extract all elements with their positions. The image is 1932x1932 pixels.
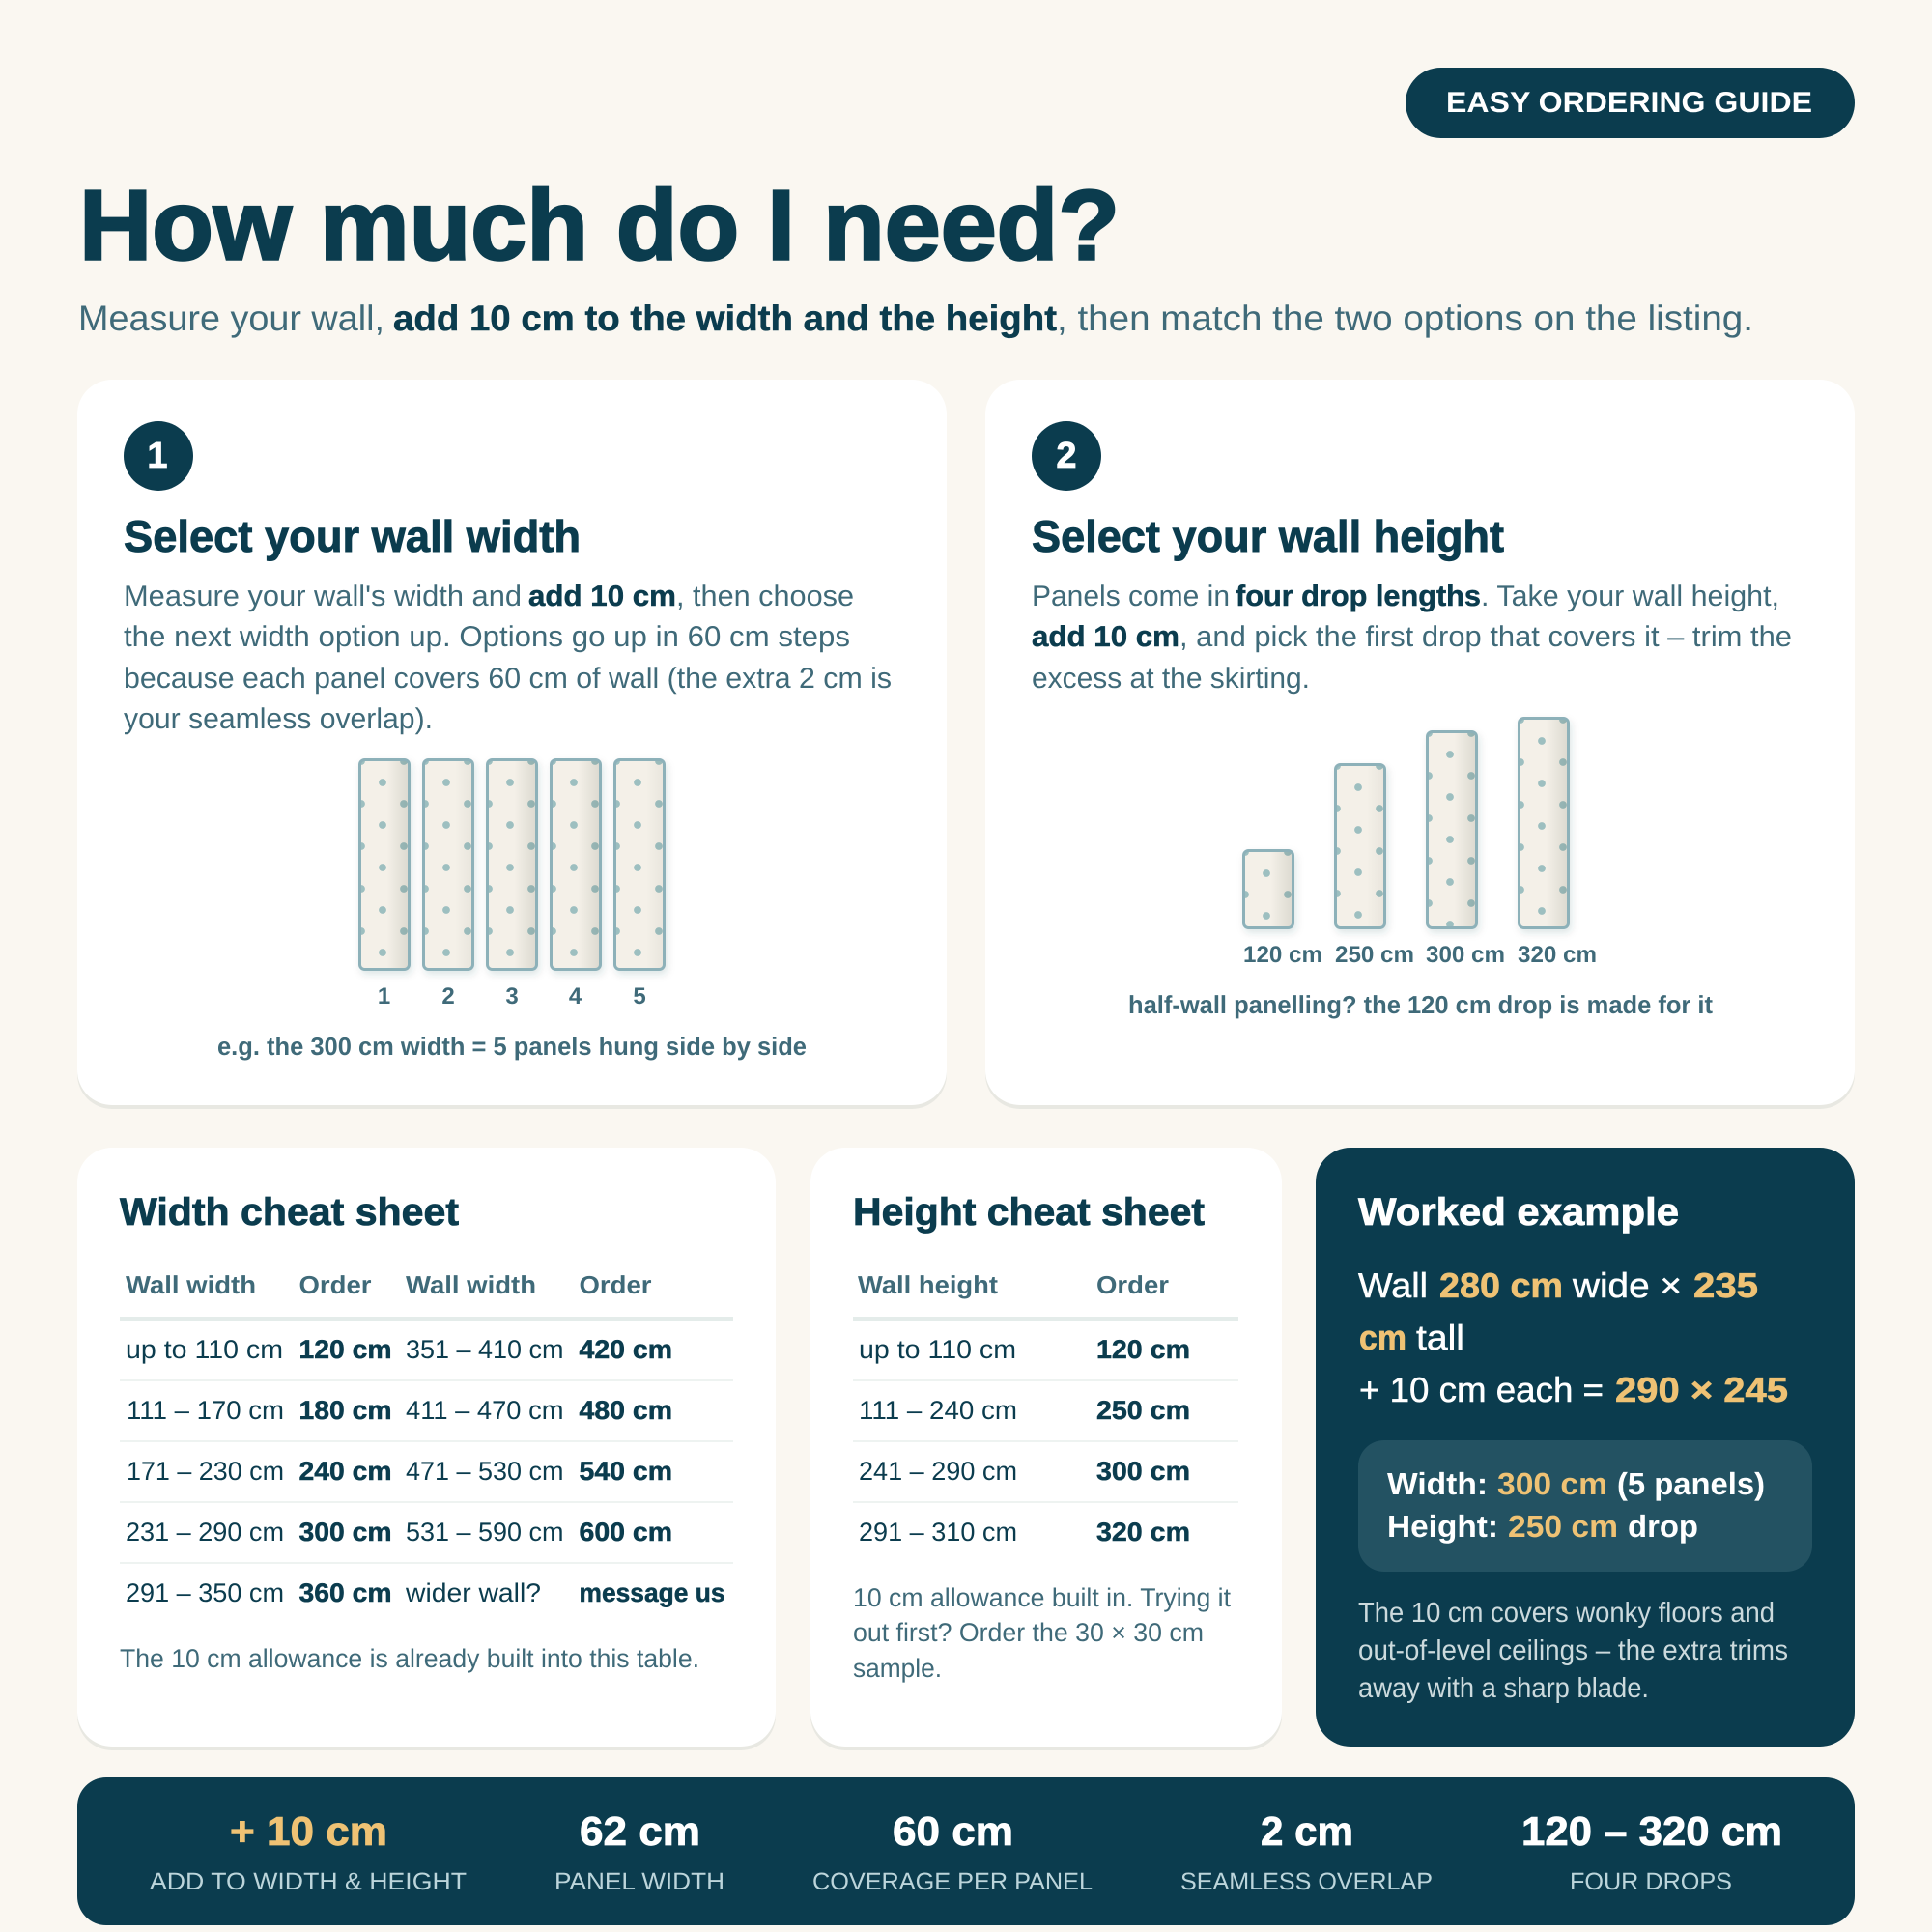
step number 2 xyxy=(1032,421,1101,491)
result box: (5 panels) xyxy=(1617,1466,1765,1501)
body text: width instructions: the next width option up. Options go up in 60 cm steps xyxy=(124,621,850,653)
heading: height cheat sheet: Height cheat sheet xyxy=(853,1191,1205,1234)
table: height to order: 300 cm xyxy=(1096,1457,1190,1486)
calculation lines: 290 × 245 xyxy=(1615,1370,1788,1409)
result box: Height: xyxy=(1387,1509,1498,1544)
illustration: five panels side by side: 4 xyxy=(569,983,582,1009)
table: width to order: Wall width xyxy=(406,1270,536,1299)
stat: add 10 cm: ADD TO WIDTH & HEIGHT xyxy=(150,1868,467,1895)
calculation lines xyxy=(1358,1265,1788,1409)
table: width to order: Order xyxy=(580,1270,651,1299)
body text: height instructions: Panels come in xyxy=(1032,581,1230,612)
stat: seamless overlap xyxy=(1180,1808,1433,1895)
calculation lines: 235 xyxy=(1693,1265,1758,1305)
table: width to order: 531 – 590 cm xyxy=(406,1518,564,1547)
body text: width instructions: your seamless overlap). xyxy=(124,703,433,735)
body text: height instructions: , and pick the first drop that covers it – trim the xyxy=(1179,621,1792,653)
table: width to order: 540 cm xyxy=(580,1457,672,1486)
badge: easy ordering guide: EASY ORDERING GUIDE xyxy=(1446,87,1812,119)
stat: four drops xyxy=(1521,1808,1782,1895)
stat: add 10 cm xyxy=(150,1808,467,1895)
illustration: five panels side by side xyxy=(359,759,665,1009)
title: How much do I need? xyxy=(79,170,1120,280)
stat: panel width: PANEL WIDTH xyxy=(554,1868,724,1895)
note: allowance and sample: out first? Order the 30 × 30 cm xyxy=(853,1618,1204,1647)
panel: select your wall width xyxy=(77,380,947,1109)
table: width to order: 471 – 530 cm xyxy=(406,1457,564,1486)
illustration: five panels side by side: 5 xyxy=(633,983,646,1009)
table: height to order: Order xyxy=(1096,1270,1169,1299)
explanation text: The 10 cm covers wonky floors and xyxy=(1358,1598,1775,1629)
stats bar xyxy=(77,1777,1855,1925)
table: width to order: up to 110 cm xyxy=(126,1335,283,1364)
table: height to order: 250 cm xyxy=(1096,1396,1190,1425)
table: width to order: 600 cm xyxy=(580,1518,672,1547)
note: allowance and sample: 10 cm allowance built in. Trying it xyxy=(853,1583,1231,1612)
table: width to order: 300 cm xyxy=(299,1518,392,1547)
illustration: four drop lengths: 300 cm xyxy=(1426,942,1505,968)
table: width to order: 360 cm xyxy=(299,1578,392,1607)
subtitle: , then match the two options on the listing. xyxy=(1057,298,1753,338)
stat: four drops: FOUR DROPS xyxy=(1570,1868,1732,1895)
explanation text: away with a sharp blade. xyxy=(1358,1673,1649,1704)
table: width to order: 111 – 170 cm xyxy=(127,1396,284,1425)
body text: width instructions: Measure your wall's width and xyxy=(124,581,522,612)
calculation lines: + 10 cm each = xyxy=(1359,1370,1604,1409)
table: height to order xyxy=(853,1270,1238,1547)
heading: worked example: Worked example xyxy=(1358,1191,1679,1234)
table: width to order: 120 cm xyxy=(299,1335,392,1364)
table: width to order: 180 cm xyxy=(299,1396,392,1425)
table: height to order: Wall height xyxy=(858,1270,998,1299)
illustration: five panels side by side: 1 xyxy=(378,983,390,1009)
calculation lines: tall xyxy=(1416,1318,1464,1357)
note: allowance built in: The 10 cm allowance is already built into this table. xyxy=(120,1644,699,1673)
result box: 300 cm xyxy=(1497,1466,1607,1501)
heading: select your wall width: Select your wall width xyxy=(124,511,581,561)
table: width to order: Wall width xyxy=(126,1270,256,1299)
table: height to order: up to 110 cm xyxy=(859,1335,1016,1364)
illustration: four drop lengths: 120 cm xyxy=(1243,942,1322,968)
table: height to order: 320 cm xyxy=(1096,1518,1190,1547)
table: width to order: 231 – 290 cm xyxy=(126,1518,284,1547)
body text: width instructions xyxy=(124,581,892,735)
table: width to order: wider wall? xyxy=(405,1578,541,1607)
stat: panel width: 62 cm xyxy=(580,1808,700,1854)
panel: select your wall height xyxy=(985,380,1855,1109)
illustration: five panels side by side: 2 xyxy=(441,983,455,1009)
body text: height instructions: . Take your wall height, xyxy=(1481,581,1779,612)
illustration: four drop lengths: 320 cm xyxy=(1518,942,1597,968)
result box xyxy=(1358,1440,1812,1572)
subtitle: Measure your wall, xyxy=(78,298,384,338)
step number 1 xyxy=(124,421,193,491)
stat: four drops: 120 – 320 cm xyxy=(1521,1808,1782,1854)
table: width to order: 240 cm xyxy=(299,1457,392,1486)
caption: width example: e.g. the 300 cm width = 5 panels hung side by side xyxy=(217,1032,807,1061)
table: width to order: message us xyxy=(580,1578,724,1607)
stat: seamless overlap: SEAMLESS OVERLAP xyxy=(1180,1868,1433,1895)
step number 2: 2 xyxy=(1056,436,1077,476)
calculation lines: Wall xyxy=(1358,1265,1428,1305)
table: width to order xyxy=(120,1270,733,1607)
subtitle: add 10 cm to the width and the height xyxy=(393,298,1057,338)
calculation lines: wide × xyxy=(1572,1265,1682,1305)
body text: height instructions: four drop lengths xyxy=(1236,581,1481,612)
table: height to order: 120 cm xyxy=(1096,1335,1190,1364)
calculation lines: cm xyxy=(1359,1318,1406,1357)
table: width to order: Order xyxy=(299,1270,371,1299)
table: height to order: 111 – 240 cm xyxy=(859,1396,1017,1425)
table: height to order: 241 – 290 cm xyxy=(859,1457,1017,1486)
step number 1: 1 xyxy=(147,436,168,476)
illustration: four drop lengths xyxy=(1243,719,1597,968)
body text: width instructions: add 10 cm xyxy=(528,581,676,612)
body text: height instructions: add 10 cm xyxy=(1032,621,1179,653)
body text: width instructions: because each panel covers 60 cm of wall (the extra 2 cm is xyxy=(124,663,892,695)
heading: select your wall height: Select your wall height xyxy=(1032,511,1504,561)
badge: easy ordering guide xyxy=(1406,68,1855,138)
body text: height instructions xyxy=(1032,581,1792,695)
table: height to order: 291 – 310 cm xyxy=(859,1518,1017,1547)
stat: coverage per panel xyxy=(812,1808,1093,1895)
note: allowance and sample xyxy=(853,1583,1231,1683)
table: width to order: 420 cm xyxy=(580,1335,672,1364)
stat: add 10 cm: + 10 cm xyxy=(230,1808,387,1854)
note: allowance and sample: sample. xyxy=(853,1654,942,1683)
stat: coverage per panel: 60 cm xyxy=(893,1808,1013,1854)
explanation text: out-of-level ceilings – the extra trims xyxy=(1358,1635,1788,1666)
illustration: five panels side by side: 3 xyxy=(505,983,519,1009)
table: width to order: 291 – 350 cm xyxy=(126,1578,284,1607)
panel: worked example xyxy=(1316,1148,1855,1747)
stat: coverage per panel: COVERAGE PER PANEL xyxy=(812,1868,1093,1895)
result box: Width: xyxy=(1387,1466,1488,1501)
calculation lines: 280 cm xyxy=(1439,1265,1563,1305)
illustration: four drop lengths: 250 cm xyxy=(1335,942,1414,968)
table: width to order: 351 – 410 cm xyxy=(406,1335,564,1364)
stat: panel width xyxy=(554,1808,724,1895)
subtitle xyxy=(78,298,1753,338)
table: width to order: 480 cm xyxy=(580,1396,672,1425)
panel: width cheat sheet xyxy=(77,1148,776,1750)
panel: height cheat sheet xyxy=(810,1148,1282,1750)
heading: width cheat sheet: Width cheat sheet xyxy=(120,1191,459,1234)
explanation text xyxy=(1358,1598,1788,1704)
body text: width instructions: , then choose xyxy=(676,581,854,612)
caption: half-wall tip: half-wall panelling? the 120 cm drop is made for it xyxy=(1128,990,1713,1019)
result box: 250 cm xyxy=(1508,1509,1618,1544)
result box: drop xyxy=(1628,1509,1698,1544)
stat: seamless overlap: 2 cm xyxy=(1261,1808,1353,1854)
table: width to order: 411 – 470 cm xyxy=(406,1396,564,1425)
table: width to order: 171 – 230 cm xyxy=(127,1457,284,1486)
body text: height instructions: excess at the skirting. xyxy=(1032,663,1310,695)
